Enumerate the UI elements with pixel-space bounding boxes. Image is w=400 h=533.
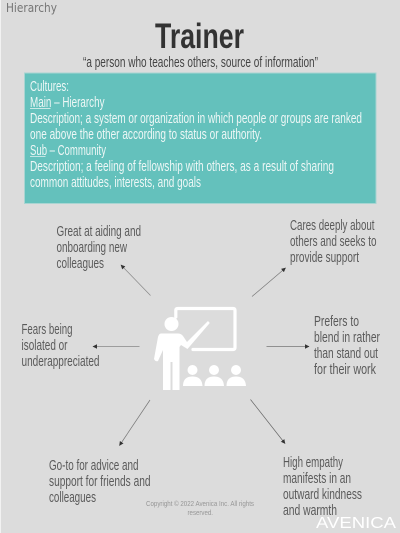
icon: trainer at board with audience	[154, 308, 246, 390]
section tag: Hierarchy: Hierarchy	[6, 1, 57, 15]
panel: cultures: one above the other according to status or authority.	[30, 127, 262, 143]
arrow: up-right	[252, 268, 286, 296]
label: fears: underappreciated	[22, 354, 100, 370]
panel: cultures: common attitudes, interests, and goals	[30, 175, 201, 191]
label: cares deeply: provide support	[290, 250, 359, 266]
label: fears: Fears being	[22, 322, 72, 338]
label: prefers to blend in	[314, 314, 380, 378]
panel: cultures: Sub – Community	[30, 143, 106, 159]
label: high empathy: High empathy	[283, 455, 343, 471]
label: go-to for advice	[49, 458, 150, 506]
copyright	[146, 499, 254, 517]
label: aiding and onboarding: onboarding new	[56, 240, 127, 256]
arrow: down-left	[120, 400, 150, 446]
label: fears	[22, 322, 100, 370]
title: Trainer	[155, 17, 244, 56]
copyright: Copyright © 2022 Avenica Inc. All rights	[146, 499, 254, 508]
label: aiding and onboarding: Great at aiding and	[56, 224, 141, 240]
arrow: down-right	[250, 400, 285, 444]
panel: cultures	[24, 73, 376, 204]
label: go-to for advice: colleagues	[49, 490, 96, 506]
panel: cultures: Cultures:	[30, 79, 69, 95]
label: go-to for advice: support for friends and	[49, 474, 150, 490]
arrow: up-left	[121, 265, 150, 296]
label: go-to for advice: Go-to for advice and	[49, 458, 138, 474]
label: high empathy: outward kindness	[283, 487, 362, 503]
label: prefers to blend in: Prefers to	[314, 314, 359, 330]
arrow: left	[93, 346, 140, 348]
arrow: right	[266, 346, 309, 348]
label: cares deeply	[290, 218, 376, 266]
label: aiding and onboarding	[56, 224, 141, 272]
label: high empathy: manifests in an	[283, 471, 351, 487]
label: high empathy: and warmth	[283, 503, 337, 519]
copyright: reserved.	[188, 508, 213, 517]
label: prefers to blend in: for their work	[314, 362, 377, 378]
panel: cultures: Main – Hierarchy	[30, 95, 105, 111]
logo: Avenica: AVENICA	[316, 515, 397, 532]
label: high empathy	[283, 455, 362, 519]
label: aiding and onboarding: colleagues	[56, 256, 104, 272]
label: fears: isolated or	[22, 338, 68, 354]
